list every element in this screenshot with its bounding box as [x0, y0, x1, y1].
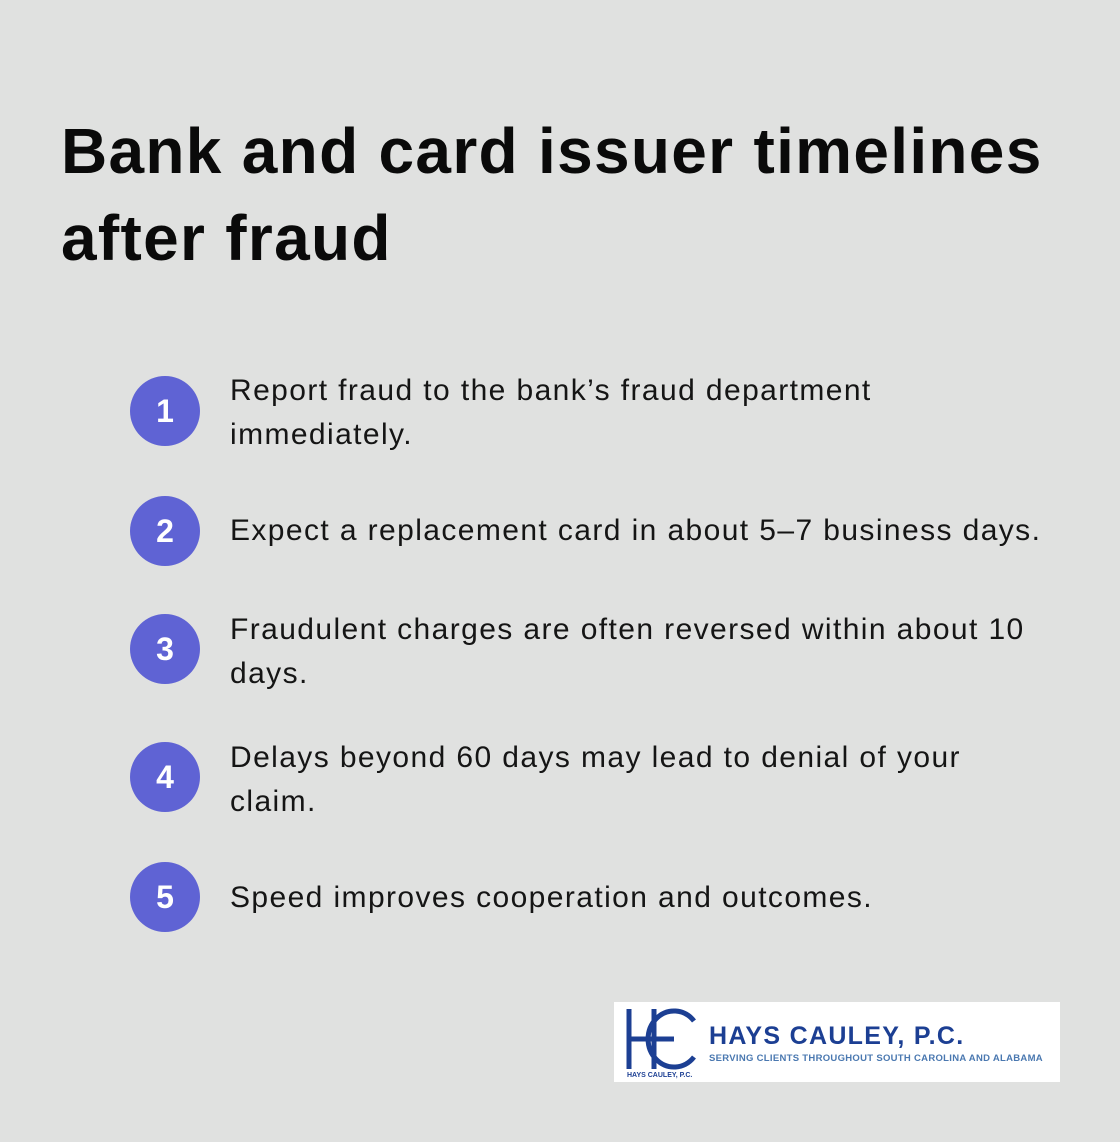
badge 4: 4 [156, 759, 174, 795]
text 1 [230, 374, 872, 451]
text 4: claim. [230, 785, 317, 818]
title [61, 115, 1043, 274]
company name: HAYS CAULEY, P.C. [709, 1022, 965, 1050]
badge 1: 1 [156, 393, 174, 429]
badge 4 [130, 742, 200, 812]
badge 5: 5 [156, 879, 174, 915]
logo [614, 1002, 1060, 1082]
badge 5 [130, 862, 200, 932]
item 4 [130, 741, 961, 818]
title: after fraud [61, 202, 392, 274]
item 1 [130, 374, 872, 451]
item 2 [130, 496, 1041, 566]
tagline: SERVING CLIENTS THROUGHOUT SOUTH CAROLINA AND ALABAMA [709, 1053, 1043, 1064]
text 5: Speed improves cooperation and outcomes. [230, 881, 873, 914]
badge 1 [130, 376, 200, 446]
badge 3: 3 [156, 631, 174, 667]
badge 2 [130, 496, 200, 566]
item 5 [130, 862, 873, 932]
text 3: days. [230, 657, 309, 690]
text 3: Fraudulent charges are often reversed within about 10 [230, 613, 1025, 646]
text 2: Expect a replacement card in about 5–7 business days. [230, 514, 1041, 547]
text 1: immediately. [230, 418, 413, 451]
badge 2: 2 [156, 513, 174, 549]
small caption: HAYS CAULEY, P.C. [627, 1072, 692, 1079]
icon: HC monogram [626, 1008, 696, 1070]
text 4: Delays beyond 60 days may lead to denial of your [230, 741, 961, 774]
text 1: Report fraud to the bank’s fraud department [230, 374, 872, 407]
text 4 [230, 741, 961, 818]
text 3 [230, 613, 1025, 690]
title: Bank and card issuer timelines [61, 115, 1043, 187]
item 3 [130, 613, 1025, 690]
badge 3 [130, 614, 200, 684]
